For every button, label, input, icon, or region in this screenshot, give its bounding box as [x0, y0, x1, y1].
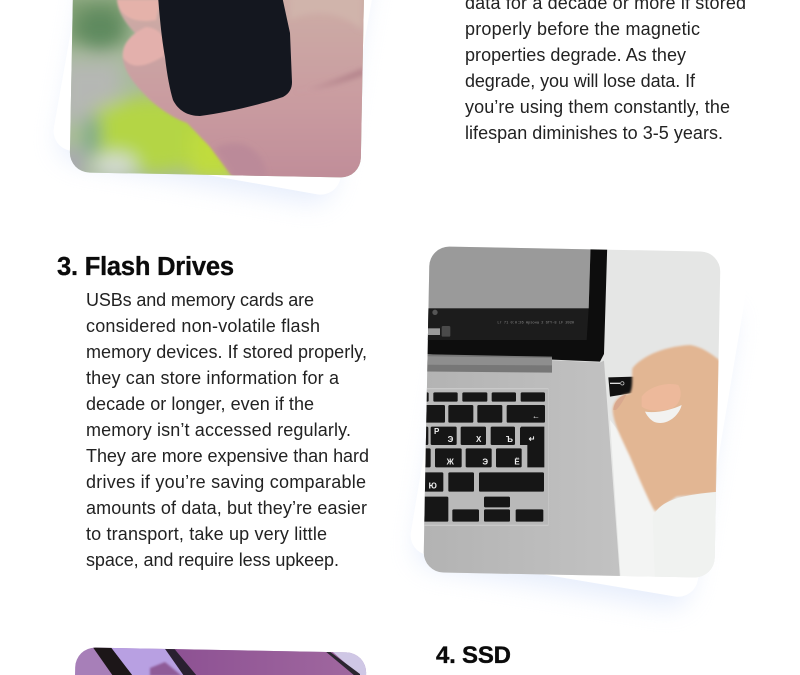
- key labels: [429, 412, 540, 491]
- key labels: Ё: [514, 458, 520, 467]
- photo: laptop with USB stick: [424, 246, 720, 578]
- key labels: P: [434, 427, 440, 436]
- text block: flash drives: drives if you’re saving comparable: [86, 472, 366, 492]
- laptop body: [413, 354, 620, 578]
- panel: flash drive photo: [412, 246, 720, 610]
- text block: flash drives: decade or longer, even if the: [86, 394, 314, 414]
- key labels: Э: [448, 435, 454, 444]
- key labels: Ю: [429, 482, 437, 491]
- icon: hand pinching USB: [613, 345, 720, 512]
- text block: flash drives: memory isn’t accessed regularly.: [86, 420, 351, 440]
- icon: USB stick: [608, 377, 635, 397]
- sleeve: [656, 492, 716, 577]
- heading: flash drives: 3. Flash Drives: [57, 253, 234, 281]
- photo: laptop with USB stick: Lr 71 0:0:26 Apsона 2 STY-8 LF 2020: [497, 321, 574, 325]
- text block: flash drives: memory devices. If stored properly,: [86, 342, 367, 362]
- text block: flash drives: They are more expensive than hard: [86, 446, 369, 466]
- text block: flash drives: USBs and memory cards are: [86, 290, 314, 310]
- photo backing card: [406, 230, 748, 611]
- text block: hard drive lifespan: lifespan diminishes to 3-5 years.: [465, 123, 723, 143]
- icon: black drive: [158, 0, 292, 116]
- key labels: Ж: [446, 458, 455, 467]
- key labels: Ъ: [506, 435, 513, 444]
- photo backing card: [49, 0, 394, 207]
- laptop screen: [420, 243, 591, 308]
- key labels: ←: [532, 412, 540, 421]
- text block: flash drives: they can store information for a: [86, 368, 340, 388]
- keyboard well: [413, 388, 549, 526]
- text block: hard drive lifespan: properly before the magnetic: [465, 19, 700, 39]
- text block: hard drive lifespan: degrade, you will lose data. If: [465, 71, 696, 91]
- heading: SSD: 4. SSD: [436, 642, 511, 669]
- key labels: Х: [476, 435, 482, 444]
- key labels: ↵: [529, 434, 535, 443]
- text block: flash drives: amounts of data, but they’re easier: [86, 498, 367, 518]
- keyboard keys: [413, 392, 545, 522]
- photo: purple-lit device: [75, 648, 366, 675]
- text block: hard drive lifespan: you’re using them constantly, the: [465, 97, 730, 117]
- text block: hard drive lifespan: properties degrade. As they: [465, 45, 686, 65]
- text block: flash drives: considered non-volatile flash: [86, 316, 320, 336]
- text block: flash drives: [86, 290, 369, 570]
- photo: hand holding black drive: [60, 0, 370, 185]
- panel: SSD photo: [75, 648, 366, 675]
- text block: flash drives: to transport, take up very little: [86, 524, 327, 544]
- panel: hard drive photo: [57, 0, 364, 206]
- text block: flash drives: space, and require less upkeep.: [86, 550, 339, 570]
- key labels: Э: [482, 458, 488, 467]
- text block: hard drive lifespan: [465, 0, 746, 143]
